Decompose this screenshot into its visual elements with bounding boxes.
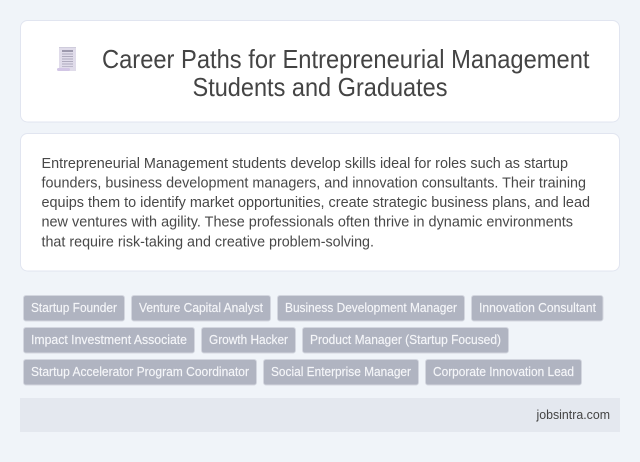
tag: Startup Founder — [24, 296, 124, 321]
text block: description: new ventures with agility. These professionals often thrive in dynamic environments — [42, 214, 573, 230]
tag: Product Manager (Startup Focused) — [302, 328, 508, 353]
tag: Corporate Innovation Lead: Corporate Innovation Lead — [433, 365, 574, 379]
footer text: source: jobsintra.com — [536, 407, 610, 422]
heading: Students and Graduates — [192, 74, 448, 102]
tag: Innovation Consultant: Innovation Consultant — [479, 301, 596, 315]
text block: description: equips them to identify market opportunities, create strategic business plans, and lead — [42, 195, 590, 211]
tag: Venture Capital Analyst — [132, 296, 270, 321]
tag: Impact Investment Associate: Impact Investment Associate — [31, 333, 187, 347]
tag: Product Manager (Startup Focused): Product Manager (Startup Focused) — [310, 333, 501, 347]
tag: Growth Hacker — [202, 328, 296, 353]
text block: description: that require risk-taking and creative problem-solving. — [42, 234, 374, 250]
text block: description: founders, business development managers, and innovation consultants. Their training — [42, 176, 586, 192]
tag: Growth Hacker: Growth Hacker — [209, 333, 288, 347]
text block: description — [42, 156, 590, 250]
tag: Innovation Consultant — [472, 296, 603, 321]
footer bar — [20, 398, 620, 432]
text block: description: Entrepreneurial Management students develop skills ideal for roles such as startup — [42, 156, 568, 172]
tag: Startup Accelerator Program Coordinator — [24, 360, 256, 385]
tag: Business Development Manager: Business Development Manager — [285, 301, 457, 315]
heading: Career Paths for Entrepreneurial Management — [102, 46, 590, 74]
tag: Startup Founder: Startup Founder — [31, 301, 117, 315]
panel: description — [20, 134, 620, 271]
heading — [102, 46, 590, 102]
tag: Business Development Manager — [278, 296, 464, 321]
icon: paper scroll — [57, 47, 76, 71]
tag list: career paths — [24, 296, 603, 385]
tag: Venture Capital Analyst: Venture Capital Analyst — [139, 301, 263, 315]
tag: Corporate Innovation Lead — [426, 360, 582, 385]
tag: Social Enterprise Manager — [264, 360, 418, 385]
tag: Impact Investment Associate — [24, 328, 194, 353]
tag: Social Enterprise Manager: Social Enterprise Manager — [271, 365, 411, 379]
panel: title card — [20, 20, 620, 122]
tag: Startup Accelerator Program Coordinator: Startup Accelerator Program Coordinator — [31, 365, 249, 379]
